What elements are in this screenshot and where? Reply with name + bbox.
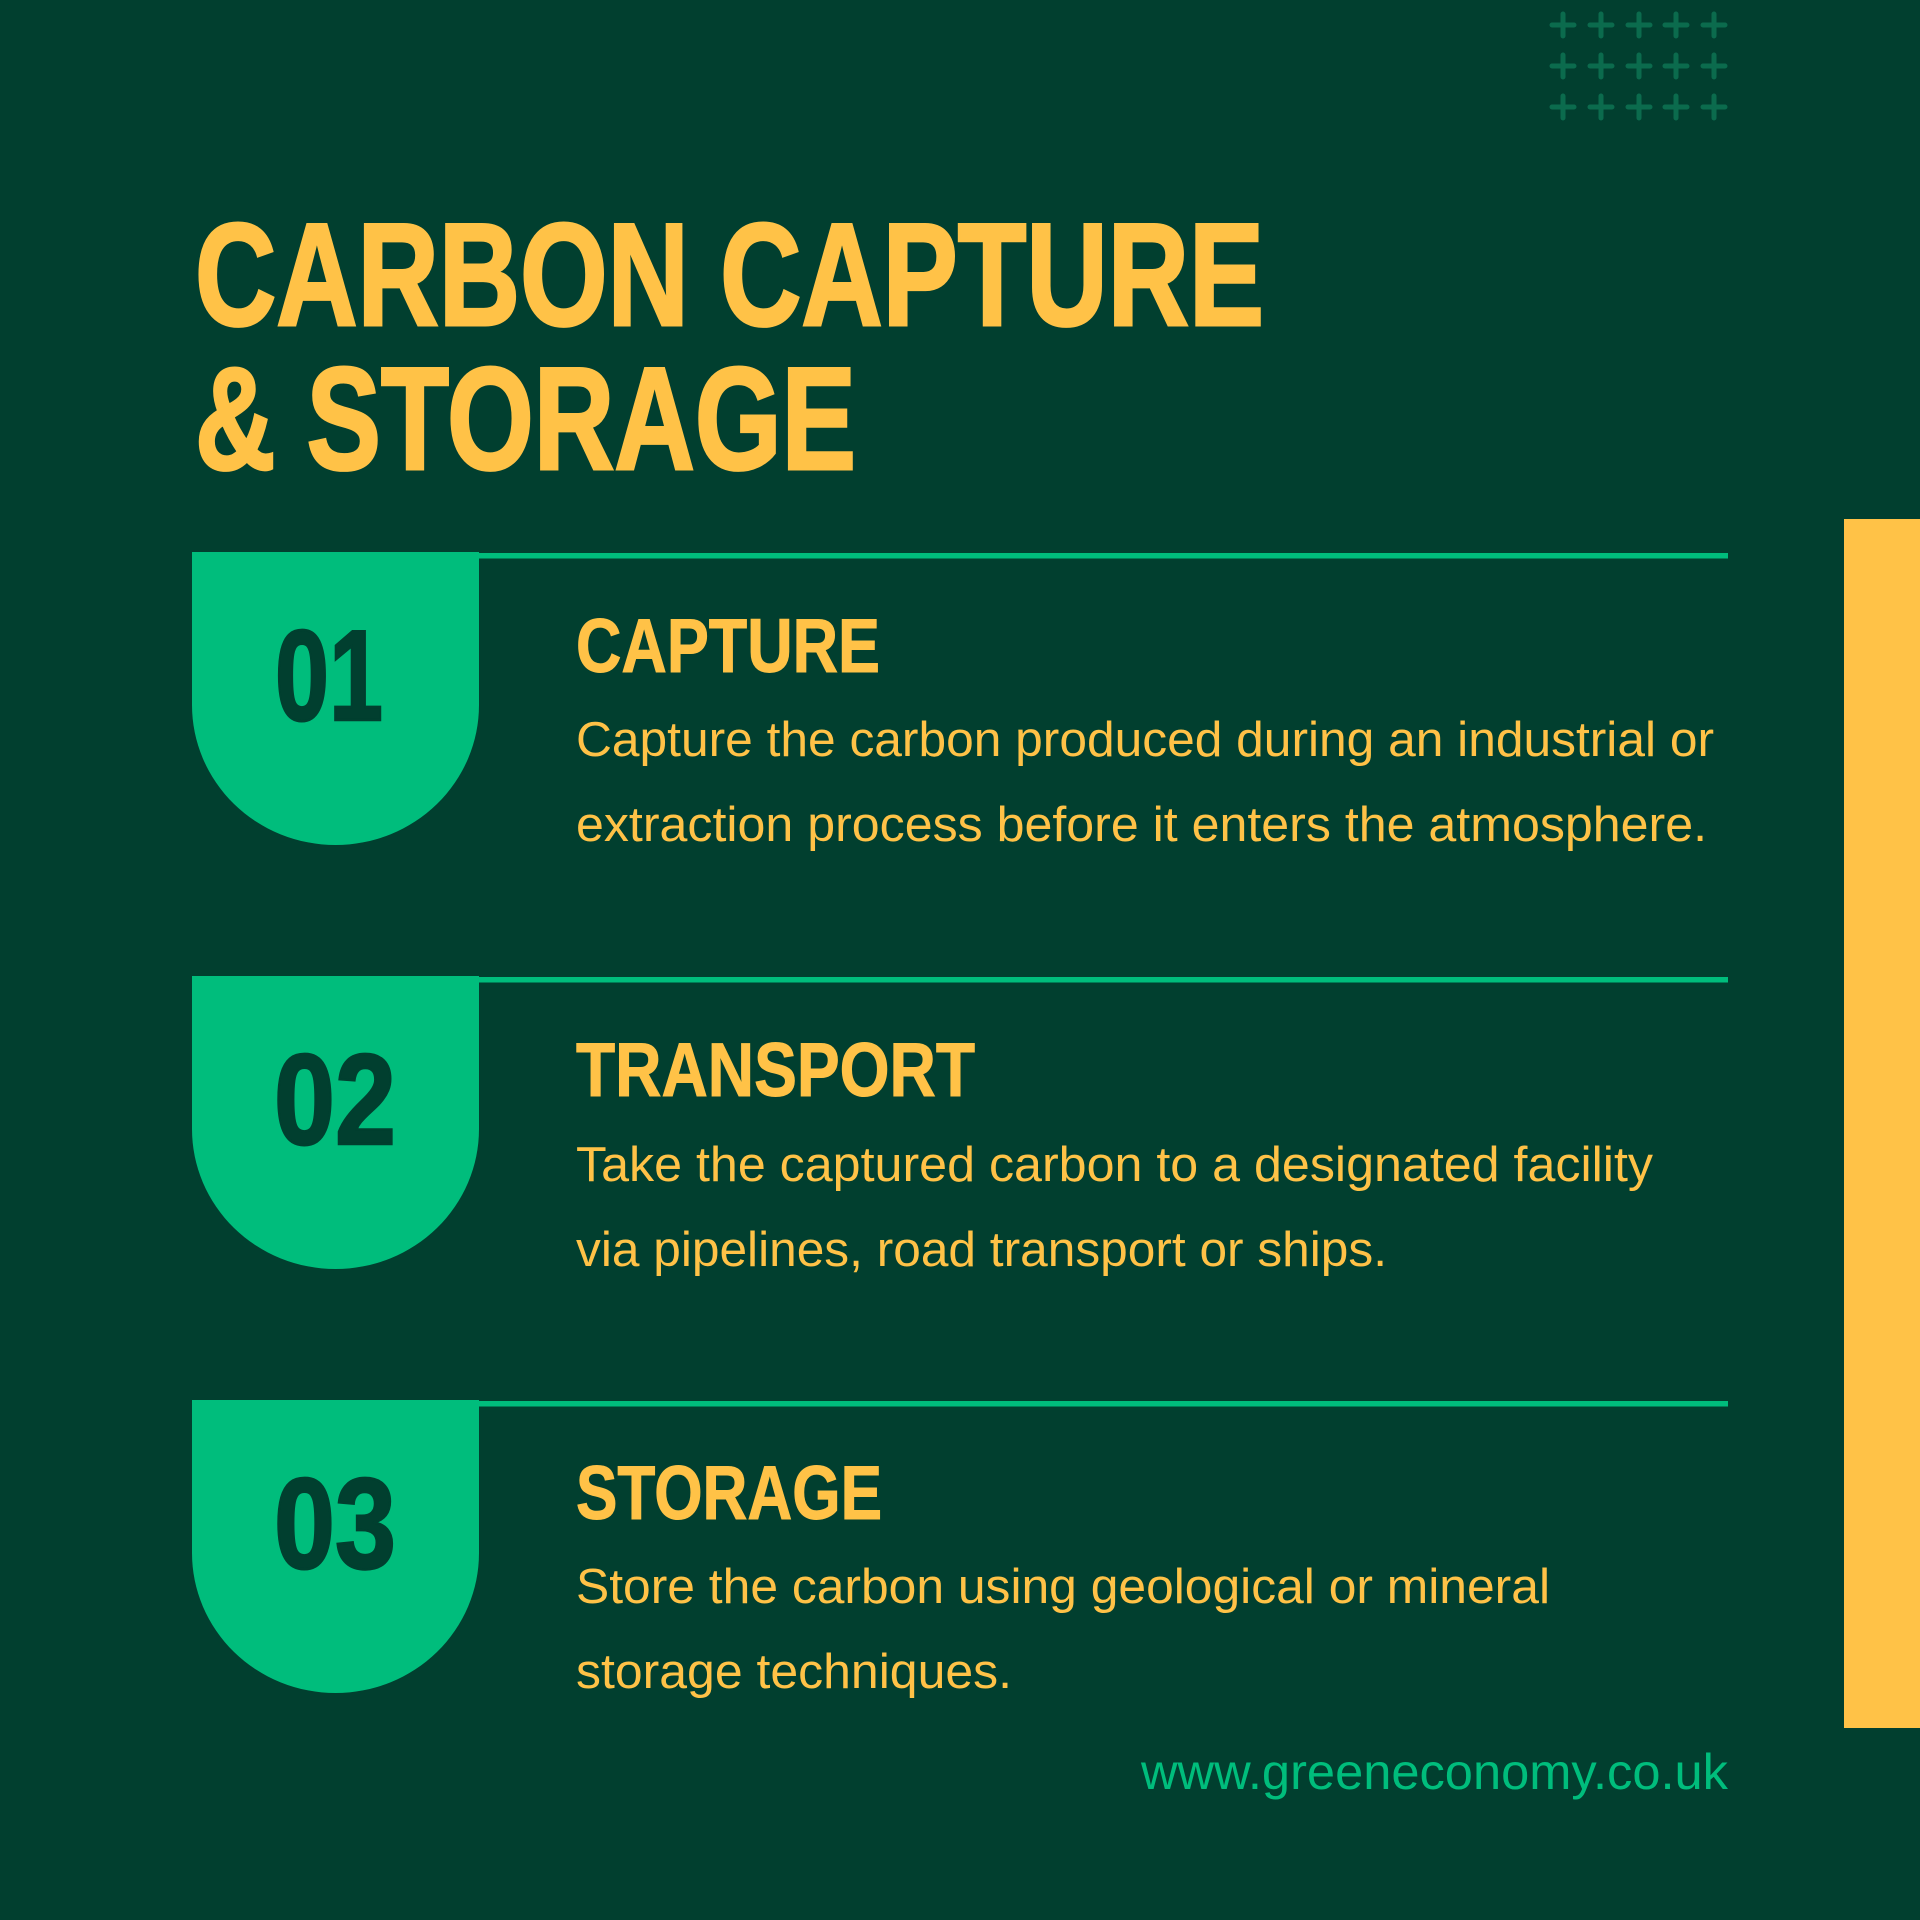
badge shape: step 2 (192, 976, 479, 1269)
badge number: 03: 03 (274, 1452, 396, 1596)
decorative plus-sign grid (1552, 14, 1725, 118)
heading: storage: STORAGE (576, 1451, 882, 1536)
badge number: 02: 02 (274, 1028, 396, 1172)
description: storage: storage techniques. (576, 1645, 1012, 1699)
badge shape: step 3 (192, 1400, 479, 1693)
badge shape: step 1 (192, 552, 479, 845)
heading: capture: CAPTURE (576, 604, 880, 689)
divider line: step 3 (478, 1401, 1728, 1406)
title (195, 193, 1264, 500)
side accent bar (1844, 519, 1920, 1728)
title: CARBON CAPTURE (195, 193, 1264, 356)
heading: transport: TRANSPORT (576, 1028, 975, 1113)
description: transport: Take the captured carbon to a designated facility (576, 1138, 1654, 1192)
description: capture (576, 713, 1714, 852)
description: transport: via pipelines, road transport or ships. (576, 1223, 1387, 1277)
divider line: step 1 (478, 553, 1728, 558)
description: capture: extraction process before it enters the atmosphere. (576, 798, 1707, 852)
panel: step 3 storage (192, 1400, 1728, 1699)
description: capture: Capture the carbon produced during an industrial or (576, 713, 1714, 767)
description: storage: Store the carbon using geological or mineral (576, 1560, 1550, 1614)
description: storage (576, 1560, 1550, 1699)
badge number: 01: 01 (275, 604, 383, 748)
description: transport (576, 1138, 1654, 1277)
website url: www.greeneconomy.co.uk (1140, 1744, 1729, 1800)
divider line: step 2 (478, 977, 1728, 982)
title: & STORAGE (195, 337, 856, 500)
panel: step 2 transport (192, 976, 1728, 1277)
panel: step 1 capture (192, 552, 1728, 852)
